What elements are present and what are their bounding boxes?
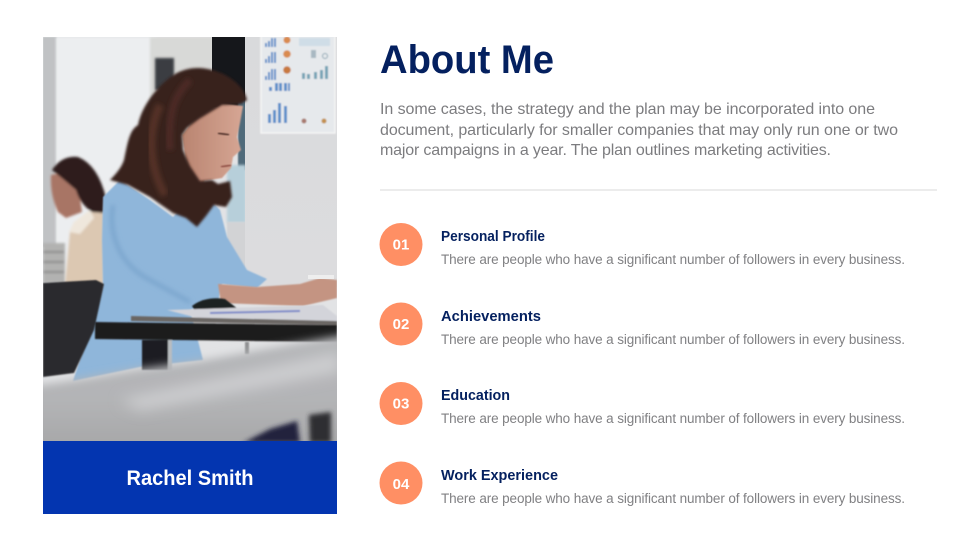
office chair <box>43 280 104 377</box>
number badge 02 <box>380 302 422 346</box>
item 03: education <box>380 382 905 426</box>
item 01: personal profile <box>380 223 905 267</box>
desk with papers <box>95 298 337 370</box>
item 04: work experience <box>380 462 905 506</box>
name banner: Rachel Smith <box>126 467 254 490</box>
intro paragraph: major campaigns in a year. The plan outlines marketing activities. <box>380 142 831 159</box>
woman's face <box>182 103 244 182</box>
intro paragraph: document, particularly for smaller companies that may only run one or two <box>380 122 898 139</box>
number badge 03 <box>380 382 422 425</box>
stacked items on the far left <box>43 243 65 283</box>
wall poster with charts <box>261 35 335 133</box>
heading: achievements: Achievements <box>441 308 541 325</box>
heading: education: Education <box>441 387 510 404</box>
number badge 01: 01 <box>393 236 409 254</box>
woman's blue shirt <box>73 180 267 381</box>
name banner <box>43 441 337 514</box>
number badge 02: 02 <box>393 316 409 333</box>
intro paragraph: In some cases, the strategy and the plan may be incorporated into one <box>380 101 875 118</box>
title: About Me <box>380 38 554 82</box>
description: There are people who have a significant number of followers in every business. <box>441 411 905 426</box>
description: There are people who have a significant number of followers in every business. <box>441 491 905 506</box>
photo: woman working at a desk <box>43 37 337 441</box>
description: There are people who have a significant number of followers in every business. <box>441 332 905 347</box>
woman's hair <box>110 68 247 227</box>
description: There are people who have a significant number of followers in every business. <box>441 252 905 267</box>
heading: personal profile: Personal Profile <box>441 228 545 245</box>
woman's arm and hands <box>218 278 337 306</box>
number badge 03: 03 <box>393 396 409 412</box>
number badge 01 <box>380 223 422 266</box>
blurred foreground <box>43 330 337 441</box>
number badge 04 <box>380 462 422 504</box>
item 02: achievements <box>380 302 905 347</box>
heading: work experience: Work Experience <box>441 467 558 484</box>
number badge 04: 04 <box>393 476 410 493</box>
background colleague <box>51 157 106 285</box>
intro paragraph <box>380 101 898 159</box>
